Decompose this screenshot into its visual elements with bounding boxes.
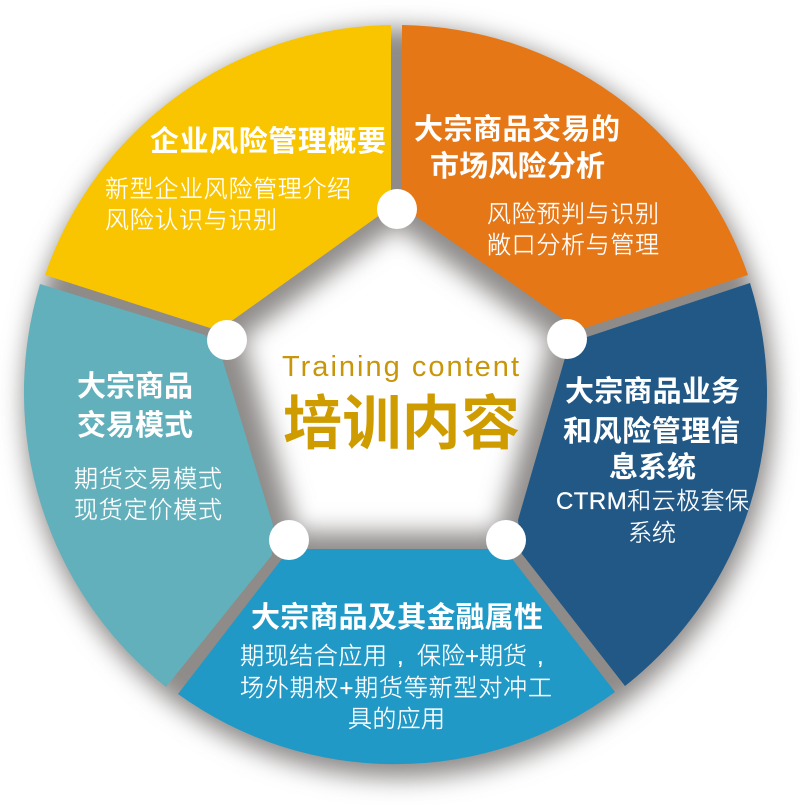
heading: CTRM systems [563, 374, 740, 484]
text: enterprise risk details: 风险认识与识别 [105, 207, 277, 234]
text: CTRM details: CTRM和云极套保 [556, 488, 749, 515]
text: trading model details: 期货交易模式 [74, 466, 222, 493]
text: financial attribute details: 具的应用 [348, 706, 445, 733]
heading: commodity trading models [77, 369, 193, 442]
heading: CTRM systems: 息系统 [609, 451, 696, 484]
center subtitle: Training content [282, 351, 519, 383]
text: enterprise risk details: 新型企业风险管理介绍 [105, 176, 351, 203]
heading: commodity trading models: 大宗商品 [77, 369, 193, 403]
text: financial attribute details [240, 643, 552, 733]
text: trading model details [74, 466, 222, 524]
heading: market risk analysis: 市场风险分析 [430, 150, 605, 183]
text: CTRM details: 系统 [628, 520, 676, 547]
panel: commodity financial attributes [178, 549, 615, 764]
heading: enterprise risk overview: 企业风险管理概要 [150, 125, 386, 158]
panel: market risk analysis [402, 25, 748, 328]
heading: market risk analysis [414, 112, 620, 183]
text: enterprise risk details [105, 176, 351, 234]
panel: commodity trading models [24, 284, 273, 687]
text: financial attribute details: 保险+期货 [417, 643, 527, 670]
text: financial attribute details: , [397, 643, 404, 670]
heading: market risk analysis: 大宗商品交易的 [414, 112, 620, 146]
panel: enterprise risk overview [45, 25, 391, 328]
heading: CTRM systems: 和风险管理信 [563, 415, 740, 448]
text: financial attribute details: 场外期权+期货等新型对冲工 [240, 675, 552, 702]
text: market risk details: 敞口分析与管理 [487, 232, 659, 259]
panel: CTRM systems [518, 283, 767, 686]
heading: commodity trading models: 交易模式 [77, 409, 193, 442]
text: trading model details: 现货定价模式 [74, 497, 222, 524]
text: market risk details [487, 201, 659, 259]
text: market risk details: 风险预判与识别 [487, 201, 659, 228]
heading: CTRM systems: 大宗商品业务 [565, 374, 740, 408]
heading: commodity financial attributes: 大宗商品及其金融属性 [251, 600, 543, 634]
center title: 培训内容 [283, 391, 520, 457]
connector dots [207, 189, 587, 560]
text: financial attribute details: 期现结合应用 [240, 643, 387, 670]
text: financial attribute details: , [537, 643, 544, 670]
text: CTRM details [556, 488, 749, 547]
